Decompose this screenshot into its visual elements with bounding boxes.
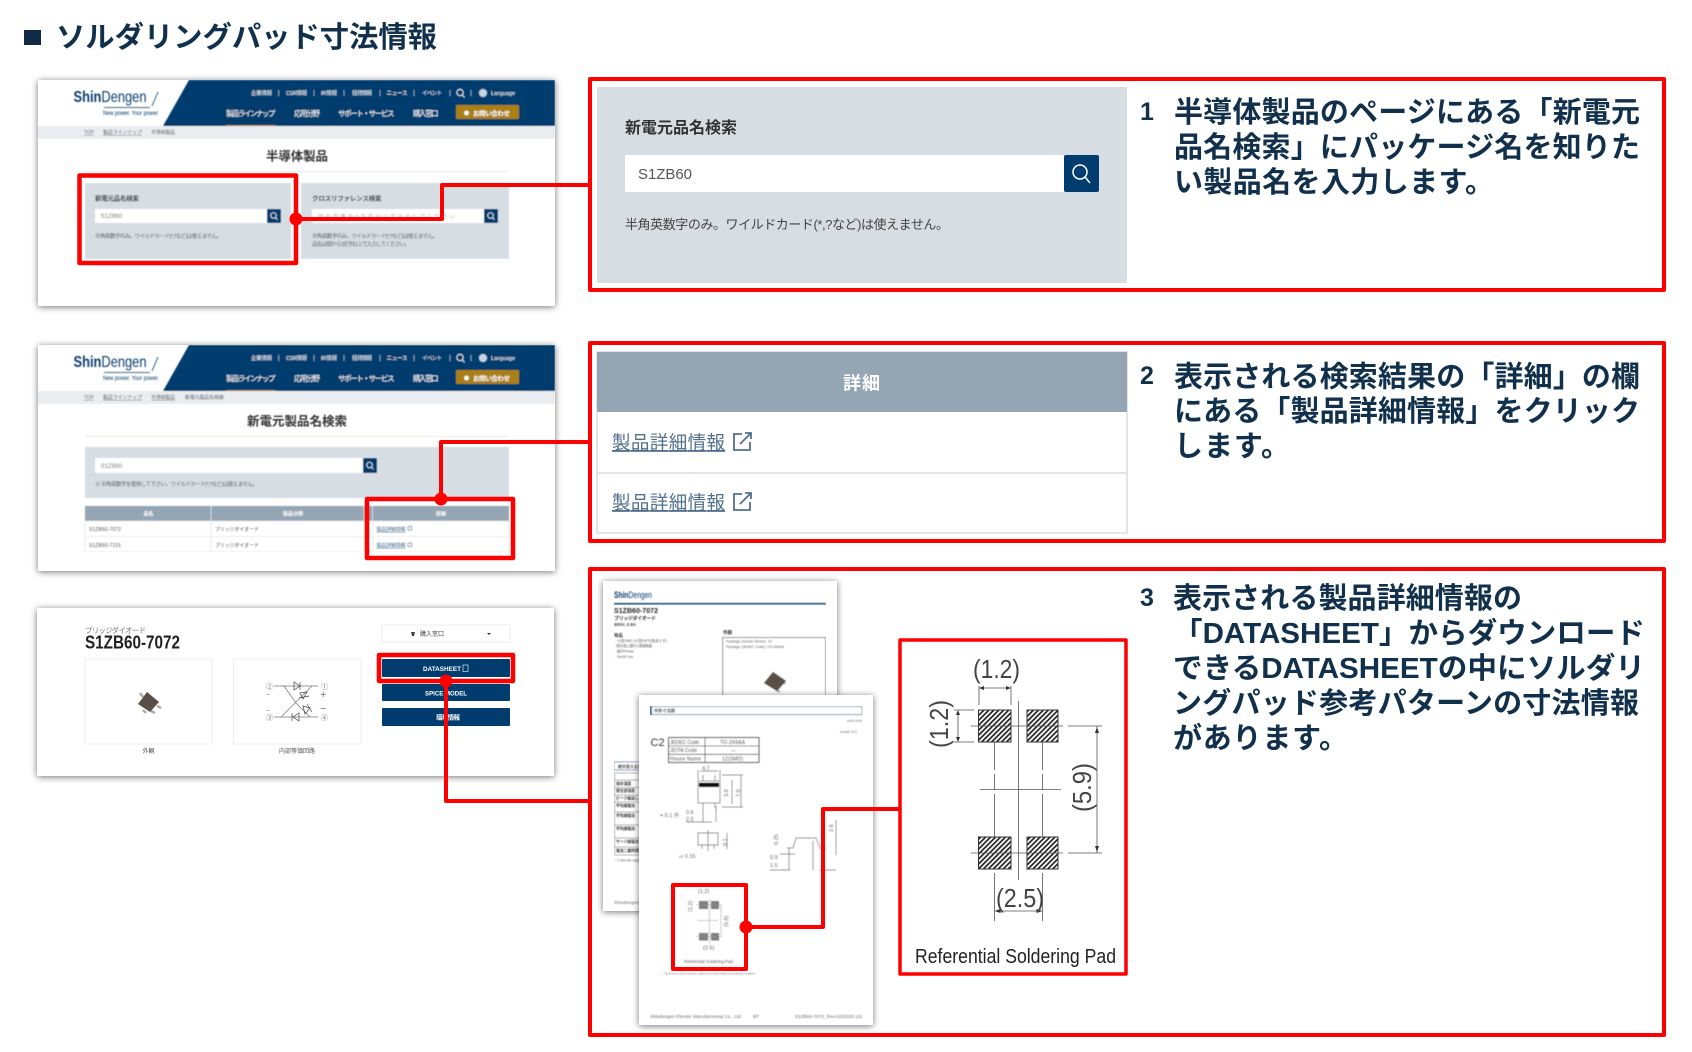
step 1 description: い製品名を入力します。 bbox=[1174, 166, 1494, 199]
package drawing page: 4.7 bbox=[702, 766, 710, 772]
package drawing page: 0.9 bbox=[770, 855, 778, 861]
package drawing page: 2.5 bbox=[686, 817, 694, 823]
site header nav: 投資情報 bbox=[352, 89, 372, 97]
breadcrumb bar: 製品ラインナップ bbox=[103, 129, 142, 136]
spice model button: SPICE MODEL bbox=[425, 690, 467, 698]
enlarged soldering pad drawing: Referential Soldering Pad bbox=[915, 946, 1116, 968]
panel 3 frame bbox=[590, 569, 1664, 1035]
results table: 製品詳細情報 bbox=[376, 526, 406, 533]
package drawing page: ⏥ 0.15 bbox=[679, 854, 695, 860]
breadcrumb bar: TOP bbox=[84, 395, 95, 401]
screenshot: product detail page bbox=[37, 608, 554, 776]
package drawing page: ⌖ 0.1 Ⓜ bbox=[660, 811, 680, 819]
site header nav: CSR情報 bbox=[286, 354, 307, 362]
internal circuit diagram: − bbox=[320, 703, 326, 715]
screenshot: semiconductor products page bbox=[38, 80, 555, 306]
package drawing page: Shindengen Electric Manufacturing Co., Ltd. bbox=[650, 1014, 742, 1019]
datasheet cover page: * 1 See the original bbox=[615, 858, 643, 862]
internal circuit diagram: ② bbox=[266, 683, 273, 691]
datasheet cover page: 外観 bbox=[723, 629, 732, 636]
datasheet cover page: サージ順電流 bbox=[616, 839, 639, 844]
search panel: cross reference bbox=[301, 183, 509, 259]
site header nav bbox=[74, 80, 555, 126]
breadcrumb bar: 製品ラインナップ bbox=[103, 394, 142, 401]
highlight box: enlarged drawing frame bbox=[900, 640, 1126, 974]
site header nav: Language bbox=[491, 91, 515, 97]
site header nav: ShinDengen bbox=[74, 354, 146, 371]
site header nav: 購入窓口 bbox=[413, 108, 438, 118]
datasheet cover page: 平均順電流 bbox=[616, 826, 635, 831]
internal circuit diagram: ③ bbox=[266, 714, 273, 722]
package drawing page: (1.2) bbox=[688, 901, 694, 912]
package drawing page: — bbox=[731, 748, 736, 754]
package drawing page: (2.5) bbox=[703, 946, 714, 952]
search panel: cross reference: 半角英数字のみ。ワイルドカード(*,?など)は使えません。 bbox=[312, 232, 438, 240]
site header nav: お問い合わせ bbox=[473, 374, 510, 382]
panel 2: result details step bbox=[590, 343, 1664, 541]
environment info button: 環境情報 bbox=[436, 712, 460, 722]
package drawing page: TO-269AA bbox=[720, 740, 746, 746]
product title: ブリッジダイオード bbox=[85, 625, 146, 635]
step 2 description: にある「製品詳細情報」をクリック bbox=[1174, 395, 1640, 428]
step 3 description: があります。 bbox=[1173, 721, 1348, 755]
buy button: 購入窓口 bbox=[420, 630, 444, 638]
breadcrumb bar bbox=[38, 391, 555, 404]
package photo bbox=[85, 659, 212, 755]
step 2 description: します。 bbox=[1174, 431, 1290, 463]
step 1 number: 1 bbox=[1140, 98, 1154, 126]
datasheet cover page: S1ZB60-7072 bbox=[614, 608, 658, 615]
environment info button bbox=[382, 708, 510, 726]
search panel: cross reference: クロスリファレンス検索 bbox=[312, 194, 382, 202]
step 3 description: できるDATASHEETの中にソルダリ bbox=[1173, 651, 1645, 685]
site header nav: 製品ラインナップ bbox=[226, 373, 276, 383]
package drawing page: JEDEC Code bbox=[670, 740, 699, 746]
internal circuit diagram: + bbox=[320, 689, 326, 701]
step 2 description bbox=[1174, 360, 1640, 463]
datasheet button: DATASHEET bbox=[423, 666, 461, 673]
site header nav: New power. Your power. bbox=[103, 376, 159, 382]
package drawing page: S1ZB60-7072_Rev.02(2020.12) bbox=[795, 1014, 862, 1019]
datasheet cover page: Shindengen bbox=[614, 900, 639, 905]
enlarged detail column: 詳細 bbox=[843, 374, 880, 394]
enlarged search form: 新電元品名検索 bbox=[625, 118, 737, 137]
results table: ブリッジダイオード bbox=[215, 542, 259, 549]
site header nav: New power. Your power. bbox=[103, 111, 159, 117]
package drawing page: 6/7 bbox=[753, 1014, 759, 1019]
step 1 description bbox=[1174, 96, 1640, 199]
internal circuit diagram: ~ bbox=[266, 708, 270, 715]
site header nav: イベント bbox=[422, 355, 442, 362]
site header nav bbox=[74, 345, 555, 391]
site header nav: サポート・サービス bbox=[338, 374, 394, 383]
site header nav: 応用分野 bbox=[294, 109, 320, 118]
datasheet cover page: 平均順電流 bbox=[616, 803, 635, 808]
site header nav: Language bbox=[491, 356, 515, 362]
package drawing page: 0.25 bbox=[774, 834, 780, 845]
connector: pad detail bbox=[740, 809, 899, 934]
internal circuit diagram: 内部等価回路 bbox=[279, 747, 315, 755]
site header nav: 企業情報 bbox=[251, 89, 272, 97]
datasheet cover page: 平均順電流 bbox=[616, 813, 635, 818]
datasheet cover page: 保存温度 bbox=[616, 781, 631, 786]
datasheet cover page: - 端子Pb free bbox=[615, 648, 634, 654]
step 3 number: 3 bbox=[1140, 584, 1154, 612]
search panel: product name bbox=[85, 183, 291, 259]
package drawing page: scale:4/1 bbox=[840, 730, 857, 734]
panel 1: name search step bbox=[590, 79, 1664, 290]
spice model button bbox=[382, 684, 510, 701]
results table: 詳細 bbox=[436, 510, 446, 518]
enlarged soldering pad drawing: (1.2) bbox=[924, 700, 954, 748]
highlight box: detail column bbox=[367, 499, 513, 558]
package drawing page: House Name bbox=[670, 756, 701, 762]
datasheet cover page: - RoHS:Yes bbox=[615, 655, 633, 659]
internal circuit diagram: ① bbox=[321, 683, 328, 691]
breadcrumb bar: 新電元製品名検索 bbox=[185, 394, 224, 401]
package drawing page: 0.1 bbox=[723, 838, 729, 846]
results table: 品名 bbox=[144, 510, 154, 518]
product title bbox=[85, 625, 180, 652]
page heading: 半導体製品 bbox=[266, 148, 328, 164]
connector: step 2 bbox=[434, 442, 590, 506]
step 1 description: 品名検索」にパッケージ名を知りた bbox=[1174, 131, 1640, 164]
step 3 description: 表示される製品詳細情報の bbox=[1173, 582, 1522, 615]
datasheet cover page: Package (JEDEC Code): TO-269AA bbox=[726, 645, 785, 649]
package drawing page: 1.5 bbox=[770, 863, 778, 869]
step 1 description: 半導体製品のページにある「新電元 bbox=[1174, 96, 1640, 129]
enlarged soldering pad drawing: (1.2) bbox=[973, 654, 1020, 684]
internal circuit diagram: ④ bbox=[321, 714, 328, 722]
site header nav: CSR情報 bbox=[286, 89, 307, 97]
search form panel bbox=[85, 447, 509, 498]
breadcrumb bar: 半導体製品 bbox=[151, 394, 175, 401]
datasheet cover page: - 小型SMD (小型DIP代表品です) bbox=[615, 638, 667, 643]
highlight box: product name search bbox=[80, 176, 296, 263]
datasheet cover page: 接合部温度 bbox=[616, 788, 635, 793]
title square bullet bbox=[24, 30, 41, 45]
package photo: 外観 bbox=[142, 747, 154, 755]
results table: ブリッジダイオード bbox=[215, 526, 259, 533]
datasheet cover page: 電流二乗時間積 bbox=[616, 848, 643, 853]
datasheet button bbox=[382, 659, 510, 677]
search form panel: ※ 半角英数字を使用して下さい。ワイルドカード(*,?など)は使えません。 bbox=[95, 480, 258, 488]
enlarged soldering pad drawing: (2.5) bbox=[996, 883, 1044, 913]
search panel: cross reference: 他社型番を3文字以上で入力してください bbox=[318, 212, 455, 220]
enlarged soldering pad drawing: (5.9) bbox=[1067, 763, 1097, 812]
breadcrumb bar: TOP bbox=[84, 130, 95, 136]
enlarged detail column: 製品詳細情報 bbox=[612, 492, 725, 513]
search panel: cross reference: 品名は頭から3文字以上で入力してください。 bbox=[312, 240, 410, 248]
package drawing page: 0.6 bbox=[686, 810, 694, 816]
enlarged detail column: 製品詳細情報 bbox=[612, 432, 725, 453]
package drawing page: * Dimensions are for reference; adjust to the board design and soldering conditions. bbox=[663, 972, 756, 976]
highlight box: soldering pad in drawing bbox=[673, 885, 746, 969]
package drawing page: 外形寸法図 bbox=[654, 707, 675, 714]
package drawing page: Referential Soldering Pad bbox=[684, 959, 733, 964]
step 2 description: 表示される検索結果の「詳細」の欄 bbox=[1174, 360, 1640, 394]
package drawing page: JEITA Code bbox=[670, 748, 697, 754]
step 3 description: ングパッド参考パターンの寸法情報 bbox=[1173, 687, 1639, 720]
package drawing page: 2.6 bbox=[829, 824, 835, 832]
site header nav: サポート・サービス bbox=[338, 109, 394, 118]
results table bbox=[85, 506, 509, 552]
site header nav: 購入窓口 bbox=[413, 373, 438, 383]
datasheet cover page: 絶対最大定格 bbox=[618, 763, 642, 769]
site header nav: ニュース bbox=[386, 90, 408, 97]
results table: S1ZB60-7101 bbox=[89, 543, 121, 549]
panel 2 frame bbox=[590, 343, 1664, 541]
datasheet cover page: 600V, 0.8A bbox=[614, 622, 637, 627]
package drawing page: 7.0 bbox=[736, 789, 742, 797]
search panel: product name: S1ZB60 bbox=[101, 214, 123, 220]
datasheet cover page: ShinDengen bbox=[614, 590, 652, 600]
step 3 description bbox=[1173, 582, 1645, 755]
breadcrumb bar bbox=[38, 126, 555, 139]
datasheet cover page: Package (House Name): 1Z bbox=[726, 640, 773, 644]
step 3 description: 「DATASHEET」からダウンロード bbox=[1173, 616, 1645, 650]
step 2 number: 2 bbox=[1140, 362, 1154, 390]
connector: step 3 bbox=[440, 674, 590, 801]
results table: 製品分類 bbox=[283, 510, 303, 518]
site header nav: お問い合わせ bbox=[473, 108, 510, 118]
datasheet cover page: 特長 bbox=[614, 632, 623, 639]
package drawing page: (5.9) bbox=[724, 916, 730, 927]
enlarged detail column bbox=[597, 352, 1127, 533]
site header nav: イベント bbox=[422, 90, 442, 97]
site header nav: 応用分野 bbox=[294, 374, 320, 383]
package drawing page: 3.8 bbox=[724, 789, 730, 797]
enlarged search form bbox=[597, 87, 1127, 283]
search panel: product name: 新電元品名検索 bbox=[95, 194, 140, 202]
datasheet cover page: ピーク繰返し bbox=[616, 796, 639, 800]
screenshot: search results page bbox=[38, 345, 555, 571]
enlarged search form: S1ZB60 bbox=[638, 166, 692, 183]
site header nav: 投資情報 bbox=[352, 354, 372, 362]
results table: S1ZB60-7072 bbox=[89, 527, 121, 533]
internal circuit diagram: ~ bbox=[266, 692, 270, 699]
internal circuit diagram bbox=[234, 659, 361, 755]
package drawing page: 1Z(SMD) bbox=[722, 756, 743, 762]
enlarged soldering pad drawing bbox=[900, 640, 1126, 974]
title bbox=[24, 20, 437, 54]
enlarged search form: 半角英数字のみ。ワイルドカード(*,?など)は使えません。 bbox=[625, 217, 949, 232]
buy button bbox=[382, 625, 510, 642]
results table: 製品詳細情報 bbox=[376, 542, 406, 549]
package drawing page: unit:mm bbox=[847, 719, 862, 723]
product title: S1ZB60-7072 bbox=[85, 632, 180, 652]
panel 1 frame bbox=[590, 79, 1664, 290]
site header nav: IR情報 bbox=[321, 89, 337, 97]
package drawing page: (1.2) bbox=[698, 889, 709, 895]
datasheet cover page bbox=[603, 581, 837, 911]
page heading: 新電元製品名検索 bbox=[247, 414, 347, 428]
site header nav: 製品ラインナップ bbox=[226, 108, 276, 118]
search panel: product name: 半角英数字のみ。ワイルドカード(*,?など)は使えません。 bbox=[95, 232, 222, 240]
breadcrumb bar: 半導体製品 bbox=[151, 129, 175, 136]
site header nav: 企業情報 bbox=[251, 354, 272, 362]
datasheet cover page: - 耐久性に優れた表面実装 bbox=[615, 643, 652, 648]
datasheet cover page: ブリッジダイオード bbox=[614, 615, 656, 622]
package drawing page: C2 bbox=[650, 737, 665, 749]
site header nav: ShinDengen bbox=[74, 89, 146, 106]
site header nav: ニュース bbox=[386, 355, 408, 362]
package drawing page bbox=[639, 695, 873, 1025]
connector: step 1 bbox=[290, 185, 590, 226]
panel 3: datasheet step bbox=[590, 569, 1664, 1035]
search form panel: S1ZB60 bbox=[101, 464, 123, 470]
site header nav: IR情報 bbox=[321, 354, 337, 362]
title text: ソルダリングパッド寸法情報 bbox=[56, 20, 437, 54]
highlight box: datasheet button bbox=[379, 655, 513, 681]
